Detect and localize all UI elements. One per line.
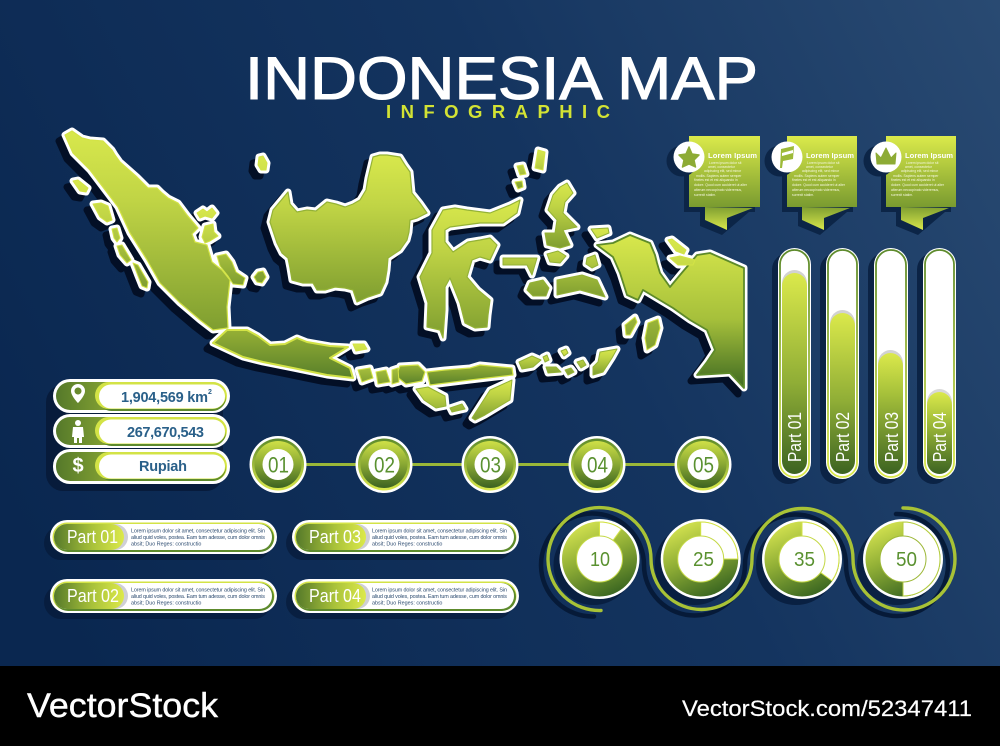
bar: Part 03 <box>868 248 908 484</box>
islands: Biak, Yapen, Aru <box>625 239 695 350</box>
donut: 25: 25 <box>693 549 714 571</box>
panel text: alterum neccopinato videremus, <box>891 188 939 192</box>
text pills <box>44 520 519 619</box>
pill: Part 04 <box>286 579 519 619</box>
panel shadow <box>782 142 853 235</box>
pill: Part 03 <box>286 520 519 560</box>
panel text: mollis. Sapiens autem semper <box>893 174 939 178</box>
panel body <box>787 136 857 207</box>
islands: west of Sumatra <box>73 180 148 288</box>
vertical bar chart <box>772 248 956 484</box>
ribbon <box>802 207 850 230</box>
panel text: fineles est et est aliquando in <box>792 178 836 182</box>
stat: area <box>53 379 230 413</box>
islands: Lesser Sunda east and Tanimbar <box>519 349 617 375</box>
subtitle: INFOGRAPHIC <box>386 101 610 122</box>
pill: Part 02: absit; Duo Reges: constructio <box>131 600 201 606</box>
panel text: amet, consectetur <box>806 165 834 169</box>
stats shadow <box>46 385 223 491</box>
icon: location pin <box>71 384 85 403</box>
ribbon <box>901 207 949 230</box>
panel text: adipiscing elit, sed minor <box>802 169 840 173</box>
footer url: VectorStock.com/52347411 <box>682 696 972 721</box>
icon: star <box>666 142 704 176</box>
panel text: amet, consectetur <box>905 165 933 169</box>
info panel: star <box>666 136 760 235</box>
icon: person <box>72 420 84 443</box>
bar: Part 02: Part 02 <box>833 412 853 462</box>
stat: population <box>53 414 230 448</box>
panel text: Lorem ipsum dolor sit <box>807 161 839 165</box>
pill: Part 01: Lorem ipsum dolor sit amet, consectetur adipiscing elit. Sin <box>131 528 265 534</box>
stat: currency: Rupiah <box>139 459 187 475</box>
panel text: dolore. Quod cum accideret ut alter <box>792 183 846 187</box>
donut: 25 <box>655 519 741 605</box>
step 02 <box>356 436 412 493</box>
pill: Part 04: aliud quid voles, postea. Eam tum adesse, cum dolor omnis <box>372 594 507 600</box>
stat: population: 267,670,543 <box>127 425 204 441</box>
icon: flag <box>764 142 802 176</box>
panel heading: Lorem Ipsum <box>708 151 757 160</box>
donut: 35 <box>756 519 842 605</box>
serpentine curve <box>548 508 955 611</box>
panel text: surrexit statim. <box>891 193 913 197</box>
country stats <box>46 379 230 491</box>
panel text: fineles est et est aliquando in <box>891 178 935 182</box>
pill: Part 02: aliud quid voles, postea. Eam tum adesse, cum dolor omnis <box>131 594 265 600</box>
step 04: 04 <box>587 452 608 478</box>
pill: Part 03: absit; Duo Reges: constructio <box>372 542 442 548</box>
pill: Part 01: aliud quid voles, postea. Eam tum adesse, cum dolor omnis <box>131 535 265 541</box>
island: Kalimantan <box>270 155 427 302</box>
pill: Part 02: Lorem ipsum dolor sit amet, consectetur adipiscing elit. Sin <box>131 588 265 594</box>
panel body <box>689 136 760 207</box>
panel body <box>886 136 956 207</box>
panel text: fineles est et est aliquando in <box>694 178 738 182</box>
panel text: dolore. Quod cum accideret ut alter <box>694 183 748 187</box>
island: Sumatra <box>65 131 230 330</box>
pill: Part 03: Part 03 <box>309 527 361 547</box>
step 03: 03 <box>480 452 501 478</box>
islands: Sula, Obi, Buru, Seram <box>503 228 609 297</box>
small islands: Belitung, Natuna <box>254 156 267 283</box>
bar: Part 01: Part 01 <box>785 412 805 462</box>
panel text: adipiscing elit, sed minor <box>704 169 742 173</box>
pill: Part 02: Part 02 <box>67 586 119 606</box>
ribbon <box>705 207 753 230</box>
island: Java <box>213 330 353 378</box>
panel text: mollis. Sapiens autem semper <box>794 174 840 178</box>
panel text: Lorem ipsum dolor sit <box>906 161 938 165</box>
donut: 10 <box>554 519 640 605</box>
panel shadow <box>881 142 951 235</box>
panel heading: Lorem Ipsum <box>806 151 854 160</box>
step 02: 02 <box>374 452 395 478</box>
bar: Part 03: Part 03 <box>882 412 902 462</box>
map white outline <box>65 131 744 420</box>
numbered timeline <box>250 436 732 493</box>
island: Papua <box>597 235 744 388</box>
map of Indonesia <box>59 131 744 426</box>
icon: dollar: $ <box>72 455 84 477</box>
info panel: flag <box>764 136 857 235</box>
islands: Madura, Bali, Lombok <box>353 344 399 384</box>
panel shadow <box>684 142 755 235</box>
pill: Part 04: Part 04 <box>309 586 361 606</box>
panel text: alterum neccopinato videremus, <box>792 188 840 192</box>
title: INDONESIA MAP <box>245 45 758 112</box>
pill: Part 02 <box>44 579 277 619</box>
pill: Part 01: Part 01 <box>67 527 118 547</box>
step 05: 05 <box>693 452 714 478</box>
step 01 <box>250 436 306 493</box>
stat: area: 2 <box>208 389 212 396</box>
step 05 <box>674 436 732 493</box>
step 01: 01 <box>268 452 289 478</box>
panel text: mollis. Sapiens autem semper <box>696 174 742 178</box>
step 04 <box>568 436 626 493</box>
pill: Part 01: absit; Duo Reges: constructio <box>131 542 201 548</box>
bar: Part 01 <box>772 248 811 484</box>
panel text: adipiscing elit, sed minor <box>901 169 939 173</box>
donut: 50 <box>857 519 943 605</box>
stat: area: 1,904,569 km <box>121 390 208 406</box>
panel text: surrexit statim. <box>694 193 716 197</box>
pill: Part 04: absit; Duo Reges: constructio <box>372 600 442 606</box>
panel text: dolore. Quod cum accideret ut alter <box>891 183 945 187</box>
island: Halmahera <box>545 183 577 248</box>
pill: Part 03: aliud quid voles, postea. Eam tum adesse, cum dolor omnis <box>372 535 507 541</box>
islands: Morotai and nearby <box>515 150 545 189</box>
donut charts <box>541 508 955 617</box>
serpentine curve shadow <box>541 514 948 617</box>
stat: currency <box>53 449 230 484</box>
donut: 35: 35 <box>794 549 815 571</box>
footer logo: VectorStock <box>27 687 219 725</box>
step 03 <box>462 436 518 493</box>
island: Sulawesi <box>420 200 520 338</box>
pill: Part 01 <box>44 520 277 560</box>
connector line <box>278 463 703 466</box>
islands: Nusa Tenggara <box>396 365 513 385</box>
panel text: surrexit statim. <box>792 193 814 197</box>
pill: Part 03: Lorem ipsum dolor sit amet, consectetur adipiscing elit. Sin <box>372 528 507 534</box>
info panel: crown <box>864 136 956 235</box>
donut: 10: 10 <box>590 549 610 571</box>
bar: Part 04 <box>917 248 956 484</box>
bar: Part 04: Part 04 <box>930 412 950 462</box>
panel text: alterum neccopinato videremus, <box>694 188 742 192</box>
bar: Part 02 <box>820 248 859 484</box>
panel text: Lorem ipsum dolor sit <box>709 161 741 165</box>
donut: 50: 50 <box>896 549 917 571</box>
pill: Part 04: Lorem ipsum dolor sit amet, consectetur adipiscing elit. Sin <box>372 588 507 594</box>
islands: Riau, Lingga, Bangka <box>197 208 245 285</box>
islands: Sumba, Timor <box>416 380 512 420</box>
panel heading: Lorem Ipsum <box>905 151 953 160</box>
footer bar <box>0 666 1000 746</box>
icon: crown <box>864 142 902 176</box>
panel text: amet, consectetur <box>708 165 736 169</box>
map shadow <box>59 137 738 426</box>
